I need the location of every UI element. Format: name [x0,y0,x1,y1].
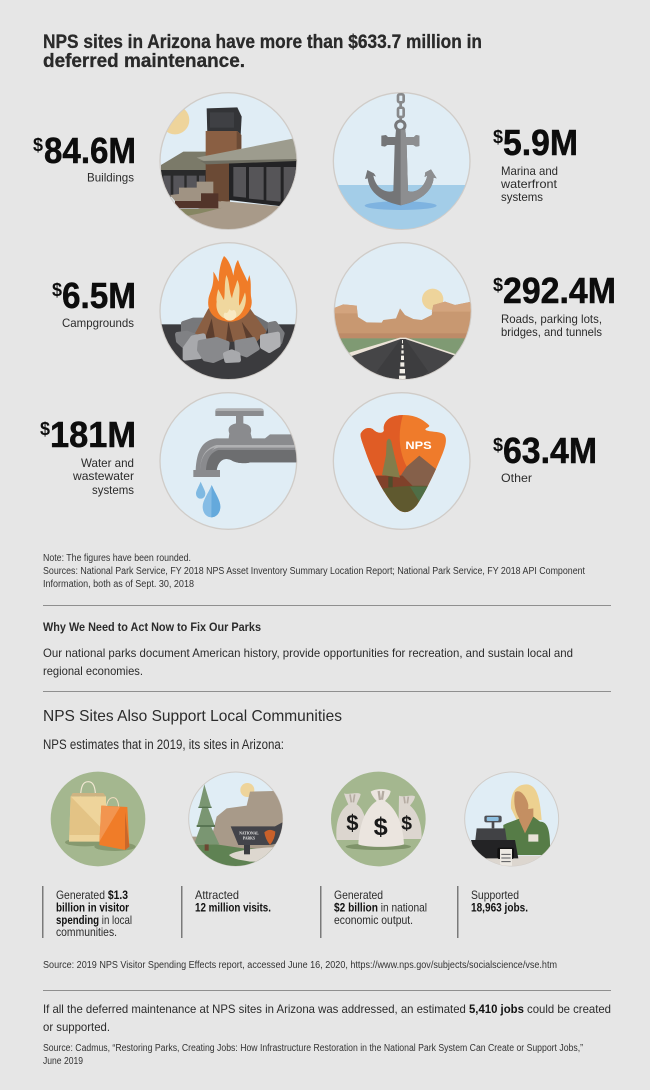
callout: economic output: economic output. [334,913,413,927]
icon: NPS arrowhead: NPS [405,440,432,452]
stat: roads: bridges, and tunnels [501,325,602,339]
stat: water: wastewater [72,469,134,483]
stat: other: Other [501,471,532,485]
text: deferred maintenance jobs: or supported. [43,1020,110,1034]
icon: anchor [330,93,473,232]
note and sources: Sources: National Park Service, FY 2018 NPS Asset Inventory Summary Location Report; National Park Service, FY 2018 API Component [43,566,585,577]
stat: water [40,414,136,497]
callout: visitor spending: billion in visitor [56,900,129,914]
callout: visits: 12 million visits. [195,900,271,914]
callout: jobs: 18,963 jobs. [471,900,528,914]
callout: economic output: $2 billion in national [334,900,427,914]
callout: visitor spending: Generated $1.3 [56,888,128,902]
note and sources: Information, both as of Sept. 30, 2018 [43,579,194,590]
icon: money bags: $ [374,813,388,841]
text: deferred maintenance jobs [43,1002,611,1034]
stat: campgrounds [52,275,136,330]
icon: NPS arrowhead [333,393,470,529]
icon: cashier [465,772,559,872]
source: cadmus: June 2019 [43,1056,83,1067]
stat: roads [493,270,616,339]
icon group: top four circles [158,93,473,382]
source: cadmus [43,1043,583,1067]
callout: visits: Attracted [195,888,239,902]
icon: national parks sign: NATIONAL [239,832,259,836]
text: why act now body: Our national parks document American history, provide opportunities for recreation, and sustain local and [43,646,573,660]
stat: buildings: $ [33,135,43,155]
stat: buildings: 84.6M [44,130,136,171]
note and sources [43,553,585,590]
icon group: lower left [51,772,287,868]
heading: local communities: NPS Sites Also Support Local Communities [43,708,342,725]
callout: visitor spending: spending in local [56,913,132,927]
stat: campgrounds: $ [52,280,62,300]
stat: buildings: Buildings [87,170,134,184]
source: cadmus: Source: Cadmus, “Restoring Parks, Creating Jobs: How Infrastructure Restoration in the National Park System Can Create or Support Jobs,” [43,1043,583,1054]
heading: why act now: Why We Need to Act Now to Fix Our Parks [43,622,261,634]
stat: water: $ [40,419,50,439]
stat: marina [493,122,578,204]
text: why act now body [43,646,573,678]
stat: other: 63.4M [503,430,597,471]
icon: money bags: $ [346,810,358,835]
icon: money bags: $ [401,814,412,835]
callout: visits [181,886,271,938]
title: deferred maintenance. [43,50,245,72]
stat: buildings [33,130,136,184]
note and sources: Note: The figures have been rounded. [43,553,191,564]
stat: marina: 5.9M [503,122,578,163]
title: NPS sites in Arizona have more than $633.7 million in [43,31,482,53]
stat: water: Water and [81,456,134,470]
icon: national parks sign: PARKS [243,837,255,841]
stat: campgrounds: Campgrounds [62,316,134,330]
callout: jobs [457,886,528,938]
stat: marina: waterfront [500,177,558,191]
stat: roads: $ [493,275,503,295]
stat: roads: Roads, parking lots, [501,312,602,326]
icon: shopping bags [51,772,145,866]
stat: roads: 292.4M [503,270,616,311]
icon: money bags [331,772,426,866]
callout: visitor spending: communities. [56,925,117,939]
icon: building [160,93,298,233]
icon: road [333,243,473,382]
stat: water: systems [92,483,134,497]
callout: jobs: Supported [471,888,519,902]
title [43,31,482,72]
text: estimates intro: NPS estimates that in 2019, its sites in Arizona: [43,737,284,752]
text: deferred maintenance jobs: If all the deferred maintenance at NPS sites in Arizona was addressed, an estimated 5,410 jobs could be created [43,1002,611,1016]
source: visitor spending: Source: 2019 NPS Visitor Spending Effects report, accessed June 16, 2020, https://www.nps.gov/subjects/socialscience/vse.htm [43,960,557,971]
callout: economic output [320,886,427,938]
icon group: water and NPS circles [160,393,470,529]
icon: national parks sign [187,772,287,868]
stat: marina: systems [501,190,543,204]
text: why act now body: regional economies. [43,664,143,678]
stat: water: 181M [50,414,136,455]
stat: other: $ [493,435,503,455]
stat: campgrounds: 6.5M [62,275,136,316]
stat: marina: Marina and [501,164,558,178]
callout: economic output: Generated [334,888,383,902]
stat: other [493,430,597,485]
icon: campfire [158,243,298,381]
stat: marina: $ [493,127,503,147]
icon: faucet [160,393,298,529]
icon group: lower right [331,772,559,872]
callout: visitor spending [42,886,132,939]
